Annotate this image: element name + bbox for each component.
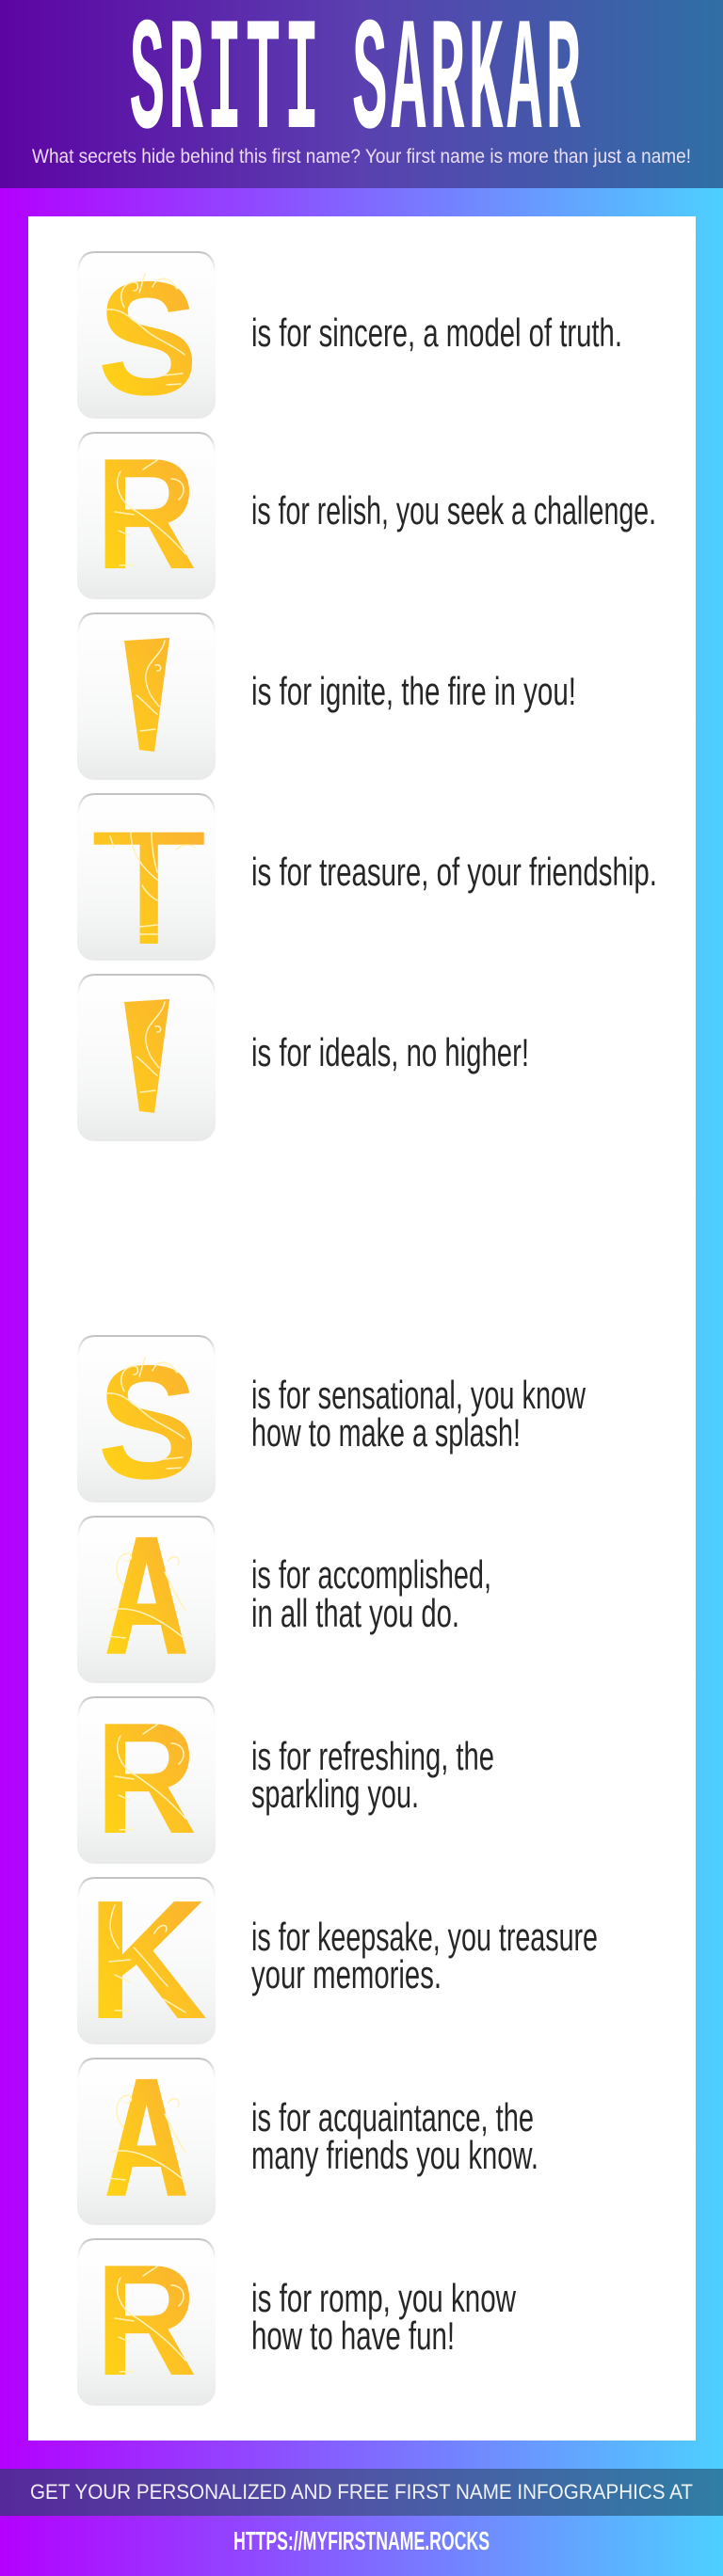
text: I line: is for ignite, the fire in you! xyxy=(251,669,576,713)
title xyxy=(130,0,585,176)
text: A line: in all that you do. xyxy=(251,1591,459,1635)
text: S second name: is for sensational, you know xyxy=(251,1373,586,1417)
footer call to action: GET YOUR PERSONALIZED AND FREE FIRST NAME INFOGRAPHICS AT xyxy=(30,2480,693,2504)
text: R third line: how to have fun! xyxy=(251,2314,455,2358)
text: R third line xyxy=(251,2276,516,2358)
text: K line: your memories. xyxy=(251,1952,442,1996)
tile: letter K: K xyxy=(88,1865,207,2054)
tile: letter R: R xyxy=(96,2232,197,2409)
tile: letter S: S xyxy=(98,1333,198,1513)
text: A line: is for accomplished, xyxy=(251,1552,491,1597)
text: A line xyxy=(251,1552,491,1635)
tile: letter A xyxy=(77,1503,216,1687)
text: I line 2: is for ideals, no higher! xyxy=(251,1030,529,1074)
text: R second line: is for refreshing, the xyxy=(251,1734,494,1778)
text: S second name: how to make a splash! xyxy=(251,1410,521,1455)
text: A line 2 xyxy=(251,2095,538,2177)
text: R second line: sparkling you. xyxy=(251,1772,419,1816)
header band xyxy=(0,0,723,188)
tile: letter T: T xyxy=(89,798,208,978)
footer band xyxy=(0,2469,723,2516)
text: R third line: is for romp, you know xyxy=(251,2276,516,2320)
tile: letter I: I xyxy=(67,600,205,789)
text: R second line xyxy=(251,1734,494,1816)
white content panel xyxy=(28,216,696,2441)
text: A line 2: many friends you know. xyxy=(251,2133,538,2177)
tile: letter S: S xyxy=(98,249,198,429)
tile: letter A: A xyxy=(105,2045,187,2229)
tile: letter I: I xyxy=(67,962,205,1151)
text: K line xyxy=(251,1915,598,1996)
tile: letter R: R xyxy=(96,425,197,602)
footer url: HTTPS://MYFIRSTNAME.ROCKS xyxy=(233,2526,490,2555)
tile: letter R: R xyxy=(96,1690,197,1867)
tile: letter A: A xyxy=(105,1503,187,1687)
text: S second name xyxy=(251,1373,586,1455)
tile: letter A xyxy=(77,2045,216,2229)
text: A line 2: is for acquaintance, the xyxy=(251,2095,534,2139)
